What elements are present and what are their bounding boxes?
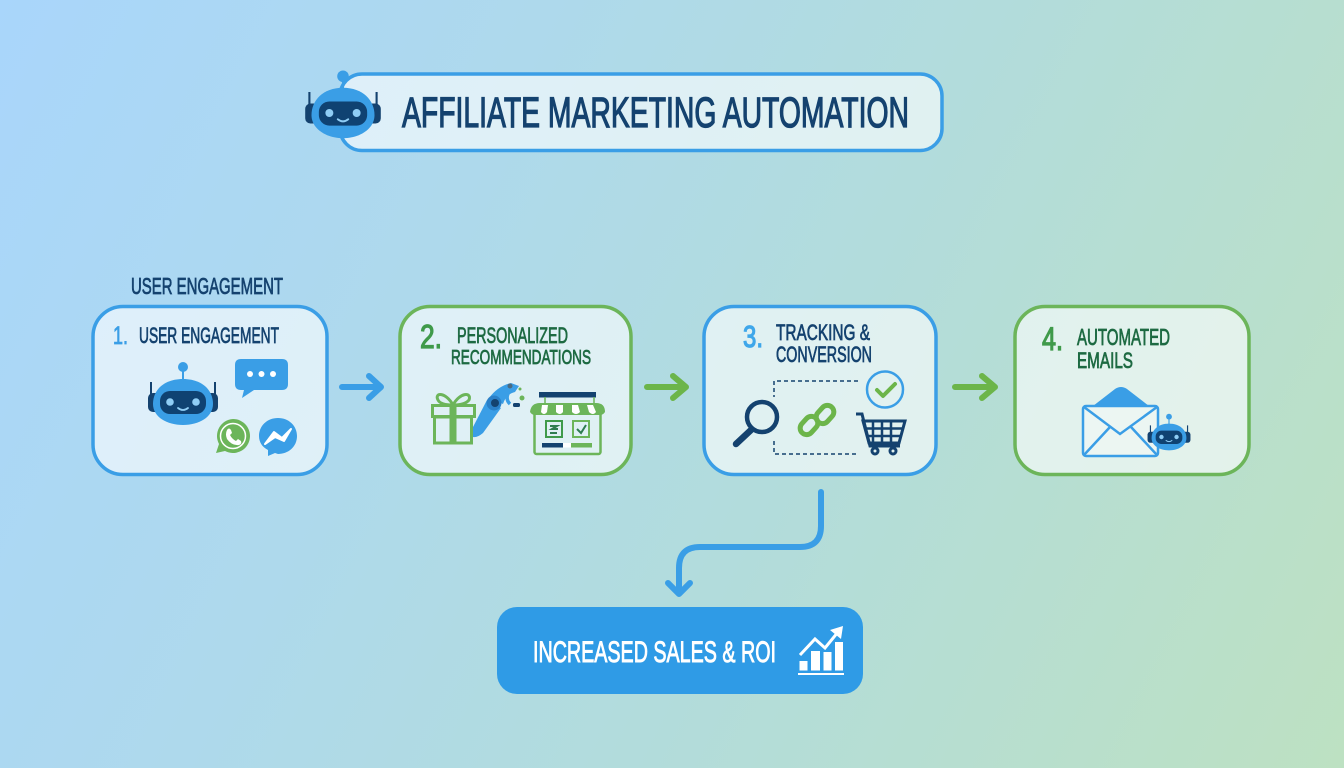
step 2 title: PERSONALIZED — [457, 323, 568, 348]
icon: chain link — [797, 403, 837, 437]
arrow: step 3 to outcome — [668, 492, 821, 594]
panel: step 4 automated emails — [1015, 306, 1249, 474]
step 1 title: USER ENGAGEMENT — [139, 323, 279, 348]
panel: outcome — [497, 607, 863, 694]
icon: title robot — [305, 70, 381, 138]
title banner — [305, 70, 942, 150]
step number 3: 3. — [743, 319, 763, 354]
icon: messenger — [259, 418, 297, 456]
panel: step 1 user engagement — [93, 306, 327, 474]
title text: AFFILIATE MARKETING AUTOMATION — [402, 89, 909, 137]
icon: check circle — [867, 372, 903, 408]
arrow: step 1 to 2 — [342, 376, 381, 398]
step 4 title: EMAILS — [1077, 348, 1133, 373]
icon: magnifier — [736, 402, 777, 444]
icon: growth chart — [798, 626, 844, 675]
section heading: user engagement: USER ENGAGEMENT — [131, 273, 283, 299]
icon: shopping cart — [856, 414, 905, 454]
icon: small robot — [1148, 414, 1190, 450]
icon: gift box — [432, 395, 474, 443]
icon: robot arm — [473, 383, 524, 437]
panel: step 2 personalized recommendations — [400, 306, 631, 474]
step 3 title: CONVERSION — [776, 342, 872, 367]
dashed tracking path — [774, 381, 858, 454]
step 3 title — [776, 320, 872, 367]
icon: envelope — [1083, 387, 1158, 456]
step 4 title: AUTOMATED — [1077, 324, 1170, 350]
panel: step 3 tracking and conversion — [704, 306, 936, 474]
step number 2: 2. — [420, 318, 442, 355]
step 3 title: TRACKING & — [776, 320, 870, 345]
outcome text: INCREASED SALES & ROI — [533, 636, 776, 669]
icon: chat bubble — [235, 359, 288, 398]
step 2 title: RECOMMENDATIONS — [451, 347, 591, 369]
icon: storefront — [530, 392, 605, 454]
step number 1: 1. — [113, 322, 128, 350]
title panel — [340, 74, 942, 150]
step 2 title — [451, 323, 591, 369]
icon: robot — [148, 362, 218, 425]
icon: whatsapp — [216, 419, 250, 453]
step number 4: 4. — [1042, 321, 1063, 357]
arrow: step 3 to 4 — [955, 376, 995, 398]
arrow: step 2 to 3 — [647, 376, 686, 398]
step 4 title — [1077, 324, 1170, 373]
